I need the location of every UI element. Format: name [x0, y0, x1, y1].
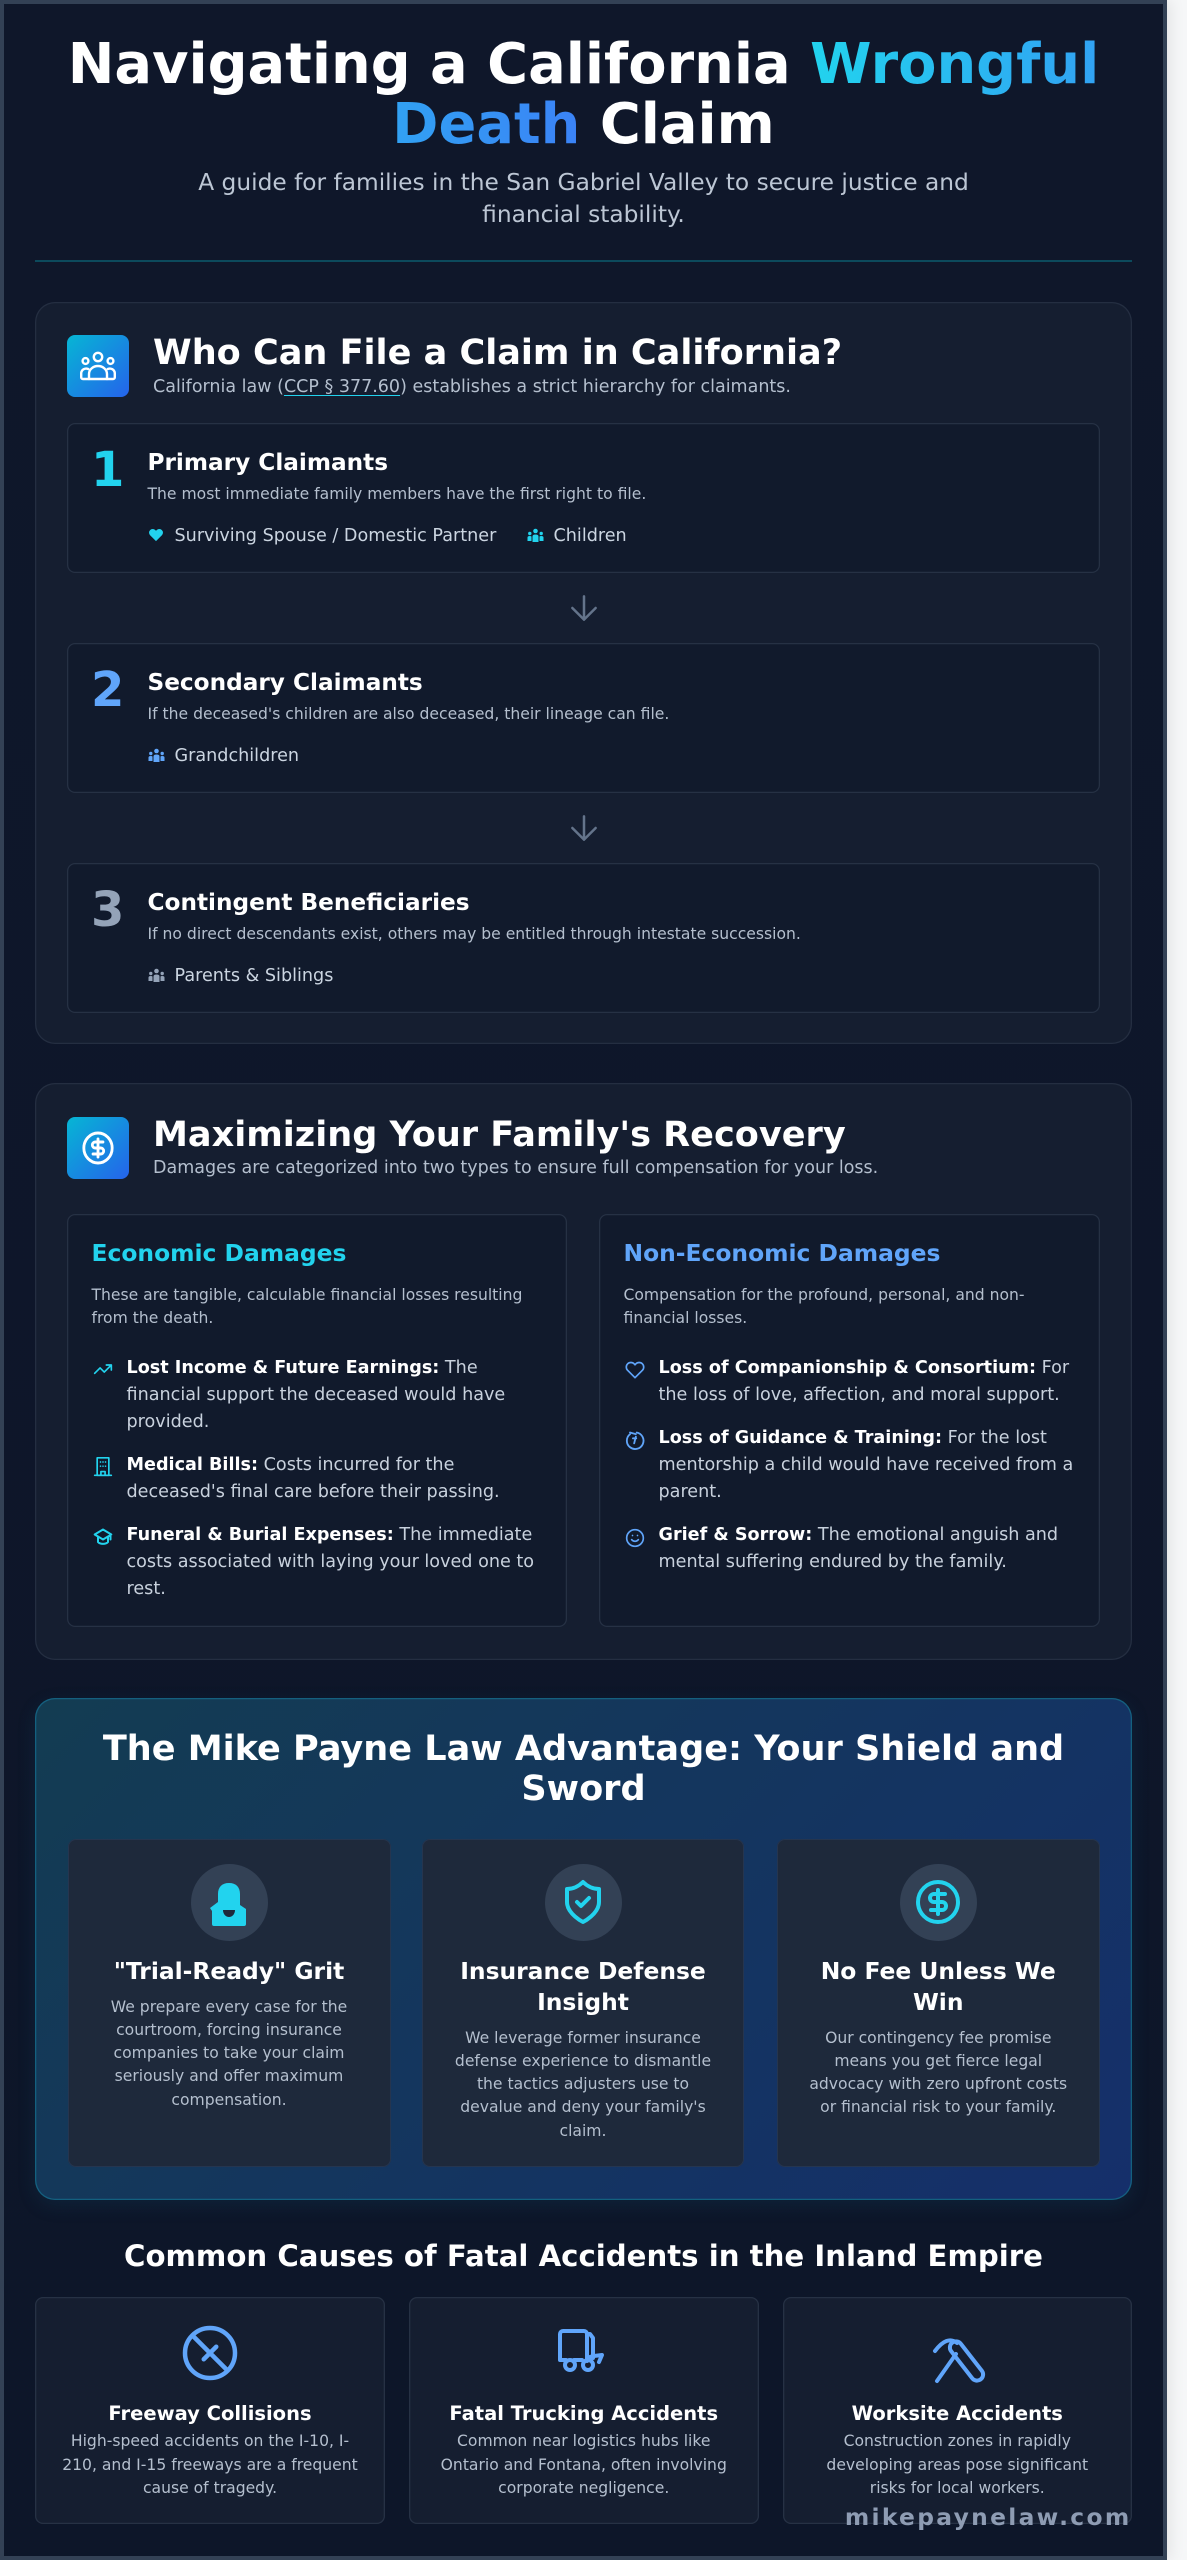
arrow down — [571, 595, 597, 621]
description: Our contingency fee promise — [825, 2029, 1051, 2047]
description: courtroom, forcing insurance — [116, 2021, 342, 2039]
icon: heart — [149, 529, 163, 541]
description: Construction zones in rapidly — [844, 2432, 1071, 2450]
number 2: 2 — [91, 662, 124, 718]
economic description: from the death. — [92, 1309, 213, 1327]
item: guidance: parent. — [658, 1482, 722, 1502]
icon: truck — [558, 2329, 604, 2372]
description: companies to take your claim — [114, 2044, 344, 2062]
subtitle: A guide for families in the San Gabriel Valley to secure justice and — [198, 169, 969, 196]
tier 1: primary claimants — [67, 423, 1100, 572]
panel: non-economic damages — [599, 1214, 1100, 1626]
icon circle — [544, 1864, 622, 1941]
title — [821, 1957, 1056, 2016]
icon: heart outline — [625, 1362, 645, 1379]
description: risks for local workers. — [870, 2479, 1045, 2497]
heading: common causes: Common Causes of Fatal Accidents in the Inland Empire — [124, 2239, 1043, 2273]
description: 210, and I-15 freeways are a frequent — [62, 2456, 358, 2474]
title — [460, 1957, 706, 2016]
non-economic heading: Non-Economic Damages — [624, 1238, 940, 1266]
icon: graduation cap — [94, 1528, 112, 1545]
section intro: Damages are categorized into two types to ensure full compensation for your loss. — [153, 1158, 878, 1178]
description: High-speed accidents on the I-10, I- — [71, 2432, 349, 2450]
description: defense experience to dismantle — [455, 2052, 711, 2070]
economic description — [91, 1286, 522, 1327]
item: grief: mental suffering endured by the family. — [658, 1552, 1007, 1572]
item: funeral: costs associated with laying your loved one to — [126, 1552, 534, 1572]
icon: trending up — [94, 1364, 112, 1374]
economic description: These are tangible, calculable financial losses resulting — [92, 1286, 522, 1304]
description: means you get fierce legal — [834, 2052, 1042, 2070]
item: funeral — [126, 1525, 534, 1599]
description — [826, 2432, 1088, 2497]
icon: circle cross — [182, 2326, 238, 2380]
item: funeral: rest. — [126, 1579, 166, 1599]
icon circle — [190, 1864, 268, 1941]
item: guidance: Loss of Guidance & Training: For the lost — [658, 1428, 1047, 1448]
watermark: mikepaynelaw.com — [845, 2503, 1132, 2531]
item: lost income — [126, 1358, 505, 1432]
title: Fatal Trucking Accidents — [449, 2402, 718, 2424]
title: Insight — [537, 1988, 629, 2016]
item: lost income: financial support the deceased would have — [126, 1385, 505, 1405]
panel: who can file a claim — [35, 302, 1132, 1044]
card: fatal trucking accidents — [409, 2297, 758, 2524]
number 3: 3 — [91, 882, 124, 938]
icon: hammer — [932, 2338, 986, 2384]
icon: people — [148, 968, 164, 982]
description: the tactics adjusters use to — [477, 2075, 689, 2093]
header — [68, 32, 1099, 228]
heading: The Mike Payne Law Advantage: Your Shield and — [103, 1728, 1064, 1769]
item: guidance — [658, 1428, 1073, 1502]
item: medical bills: deceased's final care before their passing. — [126, 1482, 500, 1502]
card: worksite accidents — [782, 2297, 1132, 2524]
panel: mike payne law advantage — [35, 1698, 1132, 2200]
item: companionship: the loss of love, affection, and moral support. — [658, 1385, 1060, 1405]
title: Win — [913, 1988, 963, 2016]
subtitle: financial stability. — [482, 201, 685, 228]
title: Freeway Collisions — [108, 2402, 312, 2424]
description: We leverage former insurance — [465, 2029, 701, 2047]
icon: building — [94, 1457, 112, 1476]
title: Worksite Accidents — [852, 2402, 1063, 2424]
economic heading: Economic Damages — [92, 1238, 346, 1266]
item: grief — [658, 1525, 1058, 1572]
description — [809, 2029, 1067, 2116]
icon: bell figure — [210, 1883, 246, 1926]
icon: dollar circle — [916, 1880, 960, 1924]
heading: Sword — [521, 1768, 646, 1808]
tier 1 description: The most immediate family members have the first right to file. — [148, 485, 646, 503]
tag: spouse: Surviving Spouse / Domestic Partner — [174, 526, 496, 546]
tier 2: secondary claimants — [67, 643, 1100, 792]
icon: smile — [626, 1528, 644, 1548]
item: funeral: Funeral & Burial Expenses: The immediate — [126, 1525, 532, 1545]
arrow down — [571, 815, 597, 841]
icon: family — [67, 335, 129, 397]
subtitle — [198, 169, 969, 228]
description: advocacy with zero upfront costs — [809, 2075, 1067, 2093]
card: no fee unless we win — [777, 1839, 1100, 2167]
non-economic description: financial losses. — [624, 1309, 747, 1327]
tag: grandchildren: Grandchildren — [174, 746, 299, 766]
title: Death Claim — [392, 92, 775, 156]
non-economic description: Compensation for the profound, personal, and non- — [624, 1286, 1025, 1304]
title: Insurance Defense — [460, 1957, 706, 1985]
title — [68, 32, 1099, 156]
item: lost income: Lost Income & Future Earnings: The — [126, 1358, 478, 1378]
icon: guidance — [626, 1432, 644, 1450]
tier 2 title: Secondary Claimants — [148, 669, 423, 696]
description — [455, 2029, 711, 2140]
heading — [103, 1728, 1064, 1808]
description: Common near logistics hubs like — [457, 2432, 710, 2450]
description: compensation. — [171, 2091, 287, 2109]
number 1: 1 — [91, 442, 124, 498]
description: claim. — [560, 2122, 606, 2140]
icon circle — [900, 1864, 977, 1941]
description: developing areas pose significant — [826, 2456, 1088, 2474]
title: No Fee Unless We — [821, 1957, 1056, 1985]
panel: economic damages — [67, 1214, 567, 1626]
description: devalue and deny your family's — [460, 2098, 706, 2116]
title: "Trial-Ready" Grit — [114, 1957, 344, 1985]
description: corporate negligence. — [498, 2479, 669, 2497]
tier 2 description: If the deceased's children are also deceased, their lineage can file. — [148, 705, 669, 723]
item: companionship: Loss of Companionship & Consortium: For — [658, 1358, 1069, 1378]
card: freeway collisions — [35, 2297, 385, 2524]
description — [111, 1998, 347, 2109]
description: We prepare every case for the — [111, 1998, 347, 2016]
tier 1 title: Primary Claimants — [148, 449, 388, 476]
description: seriously and offer maximum — [115, 2067, 343, 2085]
tier 3 description: If no direct descendants exist, others may be entitled through intestate succession. — [148, 925, 801, 943]
icon: people — [528, 528, 544, 542]
card: trial-ready grit — [68, 1839, 390, 2167]
card: insurance defense insight — [422, 1839, 744, 2167]
heading: Maximizing Your Family's Recovery — [153, 1114, 846, 1155]
section intro: California law (CCP § 377.60) establishes a strict hierarchy for claimants. — [153, 376, 791, 396]
tag: parents and siblings: Parents & Siblings — [174, 966, 333, 986]
title: Navigating a California Wrongful — [68, 32, 1099, 96]
item: medical bills: Medical Bills: Costs incurred for the — [126, 1455, 454, 1475]
icon: people — [148, 748, 164, 762]
item: grief: Grief & Sorrow: The emotional anguish and — [658, 1525, 1058, 1545]
icon: shield check — [565, 1880, 601, 1924]
description: Ontario and Fontana, often involving — [441, 2456, 727, 2474]
description — [62, 2432, 358, 2497]
panel: maximizing recovery — [35, 1083, 1132, 1660]
item: medical bills — [126, 1455, 500, 1502]
tier 3 title: Contingent Beneficiaries — [148, 889, 470, 916]
heading: Who Can File a Claim in California? — [153, 332, 842, 373]
description: or financial risk to your family. — [820, 2098, 1056, 2116]
non-economic description — [624, 1286, 1025, 1327]
tag: children: Children — [554, 526, 627, 546]
item: lost income: provided. — [126, 1412, 209, 1432]
item: companionship — [658, 1358, 1070, 1405]
tier 3: contingent beneficiaries — [67, 863, 1100, 1012]
description: cause of tragedy. — [143, 2479, 277, 2497]
item: guidance: mentorship a child would have received from a — [658, 1455, 1073, 1475]
description — [441, 2432, 727, 2497]
icon: dollar circle — [67, 1117, 129, 1179]
